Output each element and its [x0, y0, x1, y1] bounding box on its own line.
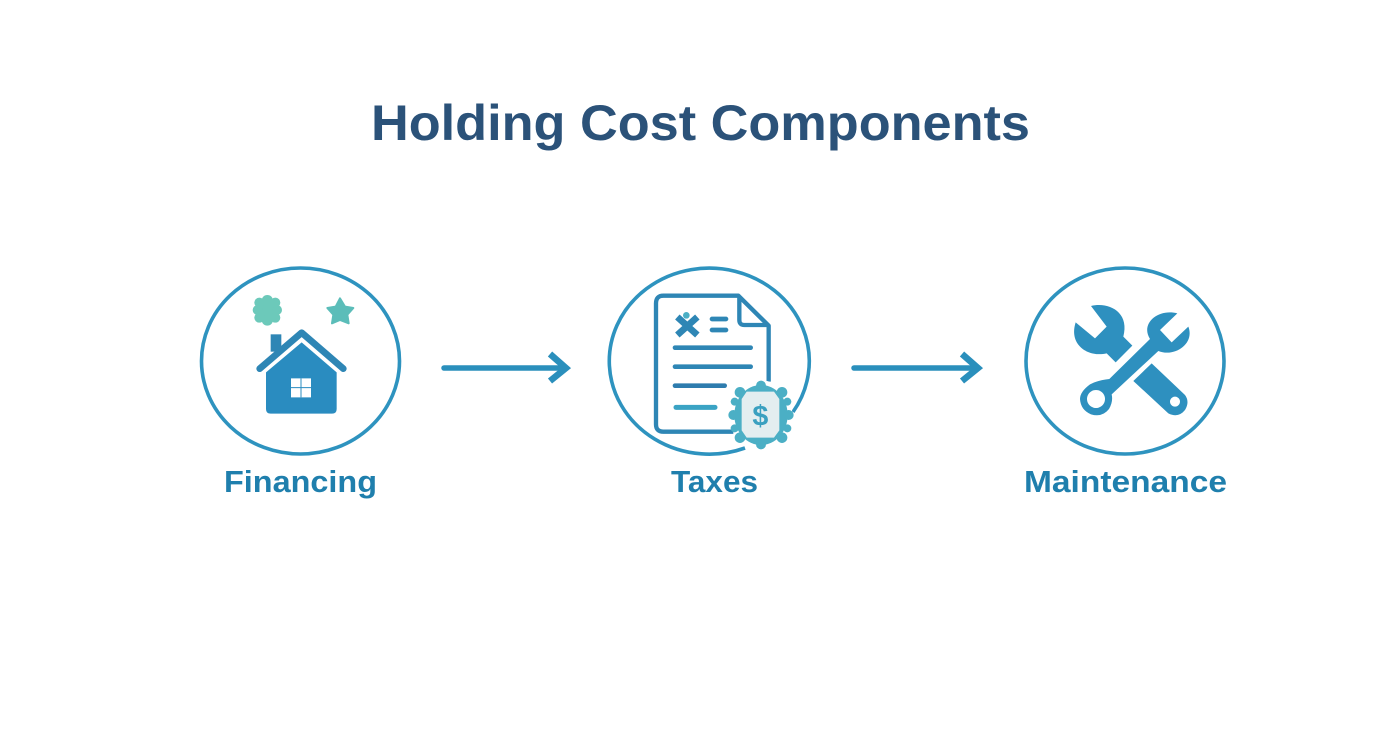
- taxes circle: [609, 268, 809, 454]
- badge: $: [752, 400, 768, 432]
- document text lines: [675, 319, 751, 407]
- wrench one head: [1074, 305, 1132, 362]
- badge: [728, 380, 794, 450]
- icon: tax document with badge: [656, 296, 794, 450]
- arrow 2: [854, 354, 978, 381]
- document mark: [677, 312, 697, 335]
- arrow 1: [444, 354, 566, 381]
- label: maintenance: Maintenance: [1024, 464, 1227, 499]
- document outline: [656, 296, 769, 432]
- financing circle: [202, 268, 400, 454]
- document fold: [739, 297, 768, 325]
- icon: crossed wrenches: [1074, 305, 1190, 415]
- icon: house with clover and star: [253, 295, 353, 414]
- icon: star: [327, 298, 353, 323]
- panel: taxes: [609, 268, 809, 499]
- label: taxes: Taxes: [671, 464, 758, 499]
- icon: clover: [253, 295, 282, 326]
- wrench two: [1080, 312, 1190, 415]
- panel: maintenance: [1024, 268, 1227, 499]
- title: Holding Cost Components: [371, 95, 1030, 151]
- icon: house: [260, 333, 343, 414]
- wrench one handle: [1133, 363, 1187, 415]
- label: financing: Financing: [224, 464, 377, 499]
- maintenance circle: [1026, 268, 1224, 454]
- panel: financing: [202, 268, 400, 499]
